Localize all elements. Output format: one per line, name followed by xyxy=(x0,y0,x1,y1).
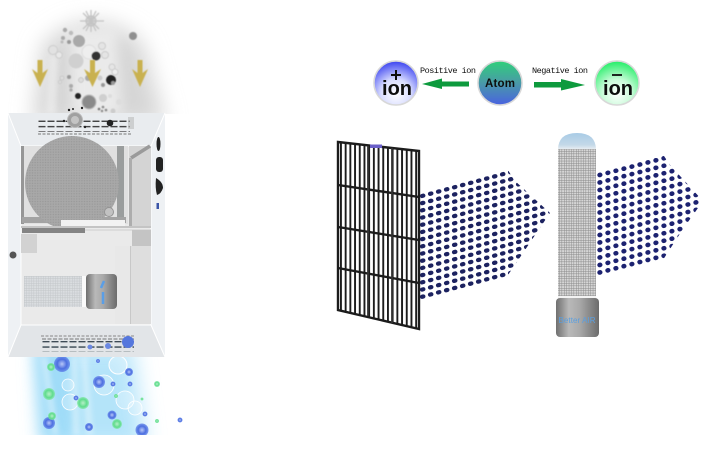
icon: polluted air particles xyxy=(48,10,137,120)
bottom vent xyxy=(41,336,134,352)
icon: clean air ions xyxy=(43,356,182,436)
device body xyxy=(8,113,165,357)
icon: positive ion xyxy=(374,61,418,105)
arrow: atom to negative ion xyxy=(534,79,585,90)
icon: arrow left xyxy=(32,60,48,87)
dome top xyxy=(558,133,596,150)
button 1 xyxy=(156,137,160,151)
negative ion label: Negative ion xyxy=(532,66,588,76)
icon: atom: Atom xyxy=(485,78,515,90)
icon: negative ion xyxy=(595,61,639,105)
button 4 xyxy=(156,203,159,209)
fan housing xyxy=(21,136,151,324)
icon: black grid electrode panel xyxy=(338,142,419,329)
icon: atom xyxy=(478,61,522,105)
chart: ion cloud from grid panel xyxy=(422,161,552,297)
side box xyxy=(115,246,151,324)
arrow: atom to positive ion xyxy=(422,78,469,89)
panel: air purifier device xyxy=(8,113,165,357)
button 2 xyxy=(156,157,163,172)
icon: ion generator tube xyxy=(556,133,599,337)
mesh body xyxy=(558,149,596,297)
icon: side control buttons xyxy=(10,137,163,258)
icon: positive ion: ion xyxy=(382,78,412,100)
clean air glow xyxy=(24,357,156,435)
brand text: Better AIR xyxy=(558,316,596,325)
icon: arrow right xyxy=(132,60,148,87)
diagram: ion formation xyxy=(374,61,639,105)
purple indicator tab xyxy=(370,144,382,148)
grey polluted air haze xyxy=(32,22,166,125)
icon: cylindrical ion filter xyxy=(24,276,84,307)
icon: arrow centre xyxy=(84,60,101,87)
icon: negative ion: ion xyxy=(603,78,633,100)
interior xyxy=(21,146,151,325)
top vent xyxy=(38,107,134,134)
left latch xyxy=(10,252,16,258)
positive ion label: Positive ion xyxy=(420,66,476,76)
chart: ion cloud from brush tube xyxy=(600,149,701,272)
button 3 xyxy=(156,178,163,195)
metal base xyxy=(556,298,599,337)
icon: circular fan filter xyxy=(25,136,119,230)
icon: downward gold arrows xyxy=(32,60,148,87)
icon: spiky germ xyxy=(80,10,104,32)
